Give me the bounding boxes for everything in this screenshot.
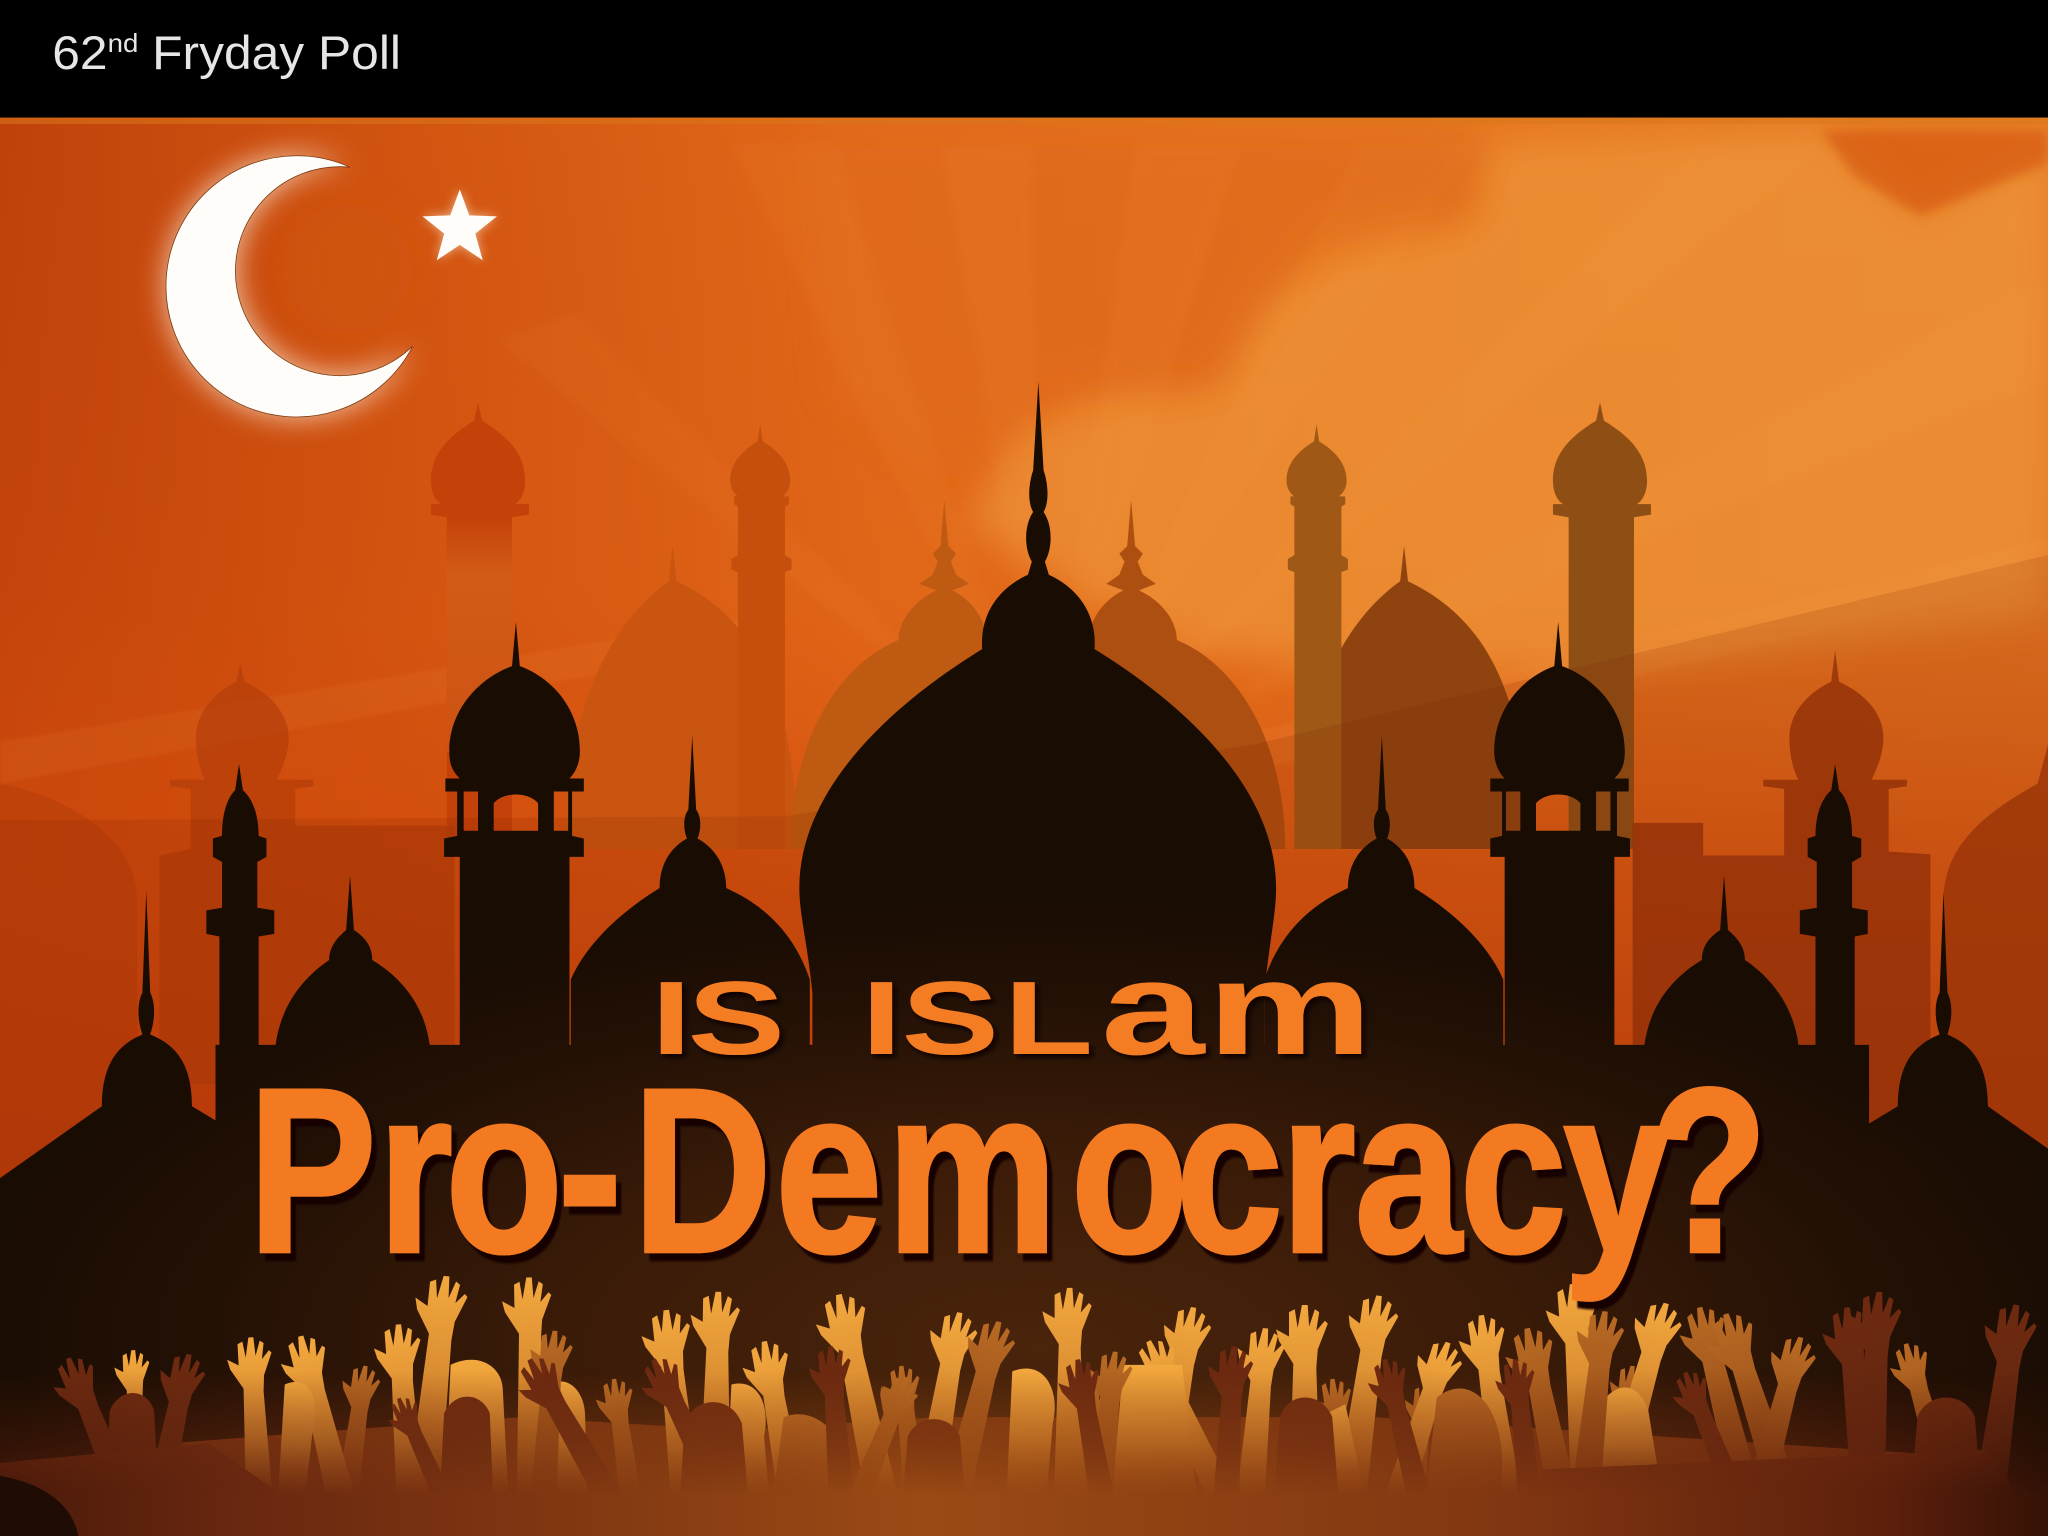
mosque: foreground dark silhouette <box>0 381 2048 1536</box>
icon: crescent moon <box>166 156 413 417</box>
crowd: dark bottom corner <box>0 1476 78 1536</box>
main central dome <box>799 381 1276 1084</box>
mosque: middle silhouettes layer <box>0 650 2048 1182</box>
cloud: upper centre haze <box>810 131 1476 470</box>
crowd: dark-red front row <box>0 1290 2048 1536</box>
crowd with raised hands <box>0 1273 2048 1536</box>
sky background <box>0 118 2048 1293</box>
header text: nd <box>108 28 138 58</box>
right minarets and domes <box>1264 622 1868 1084</box>
mosque: far silhouettes layer <box>431 402 1651 849</box>
title line: Pro-Democracy?: Pro-Democracy? <box>248 1040 1768 1302</box>
shaded lower band over far layer <box>0 555 2048 1182</box>
crowd: mid-brown back row <box>320 1363 1649 1536</box>
header text: Fryday Poll <box>138 26 401 79</box>
diagonal bands of light <box>0 611 784 784</box>
crowd: mid-brown row <box>518 1302 1975 1536</box>
crowd: light torsos <box>444 1360 509 1515</box>
cloud: bright right side <box>967 131 2048 679</box>
cloud: top-right dark patch <box>1822 131 2048 216</box>
lighter tower shaft <box>447 517 512 752</box>
icon: star <box>423 189 497 260</box>
title line: IS ISLAM: IS ISLam <box>651 934 1373 1083</box>
right far dome <box>1865 891 2048 1319</box>
crowd: light back row <box>114 1273 1686 1536</box>
left minarets and domes <box>206 622 810 1084</box>
crowd: floor glow fade <box>0 1371 2048 1536</box>
left far dome <box>0 891 225 1319</box>
crowd: torso mass <box>52 1417 2038 1536</box>
light rays <box>496 144 2048 784</box>
top black header bar <box>0 0 2048 124</box>
header text: 62 <box>52 26 105 79</box>
base ground <box>0 1045 2048 1536</box>
